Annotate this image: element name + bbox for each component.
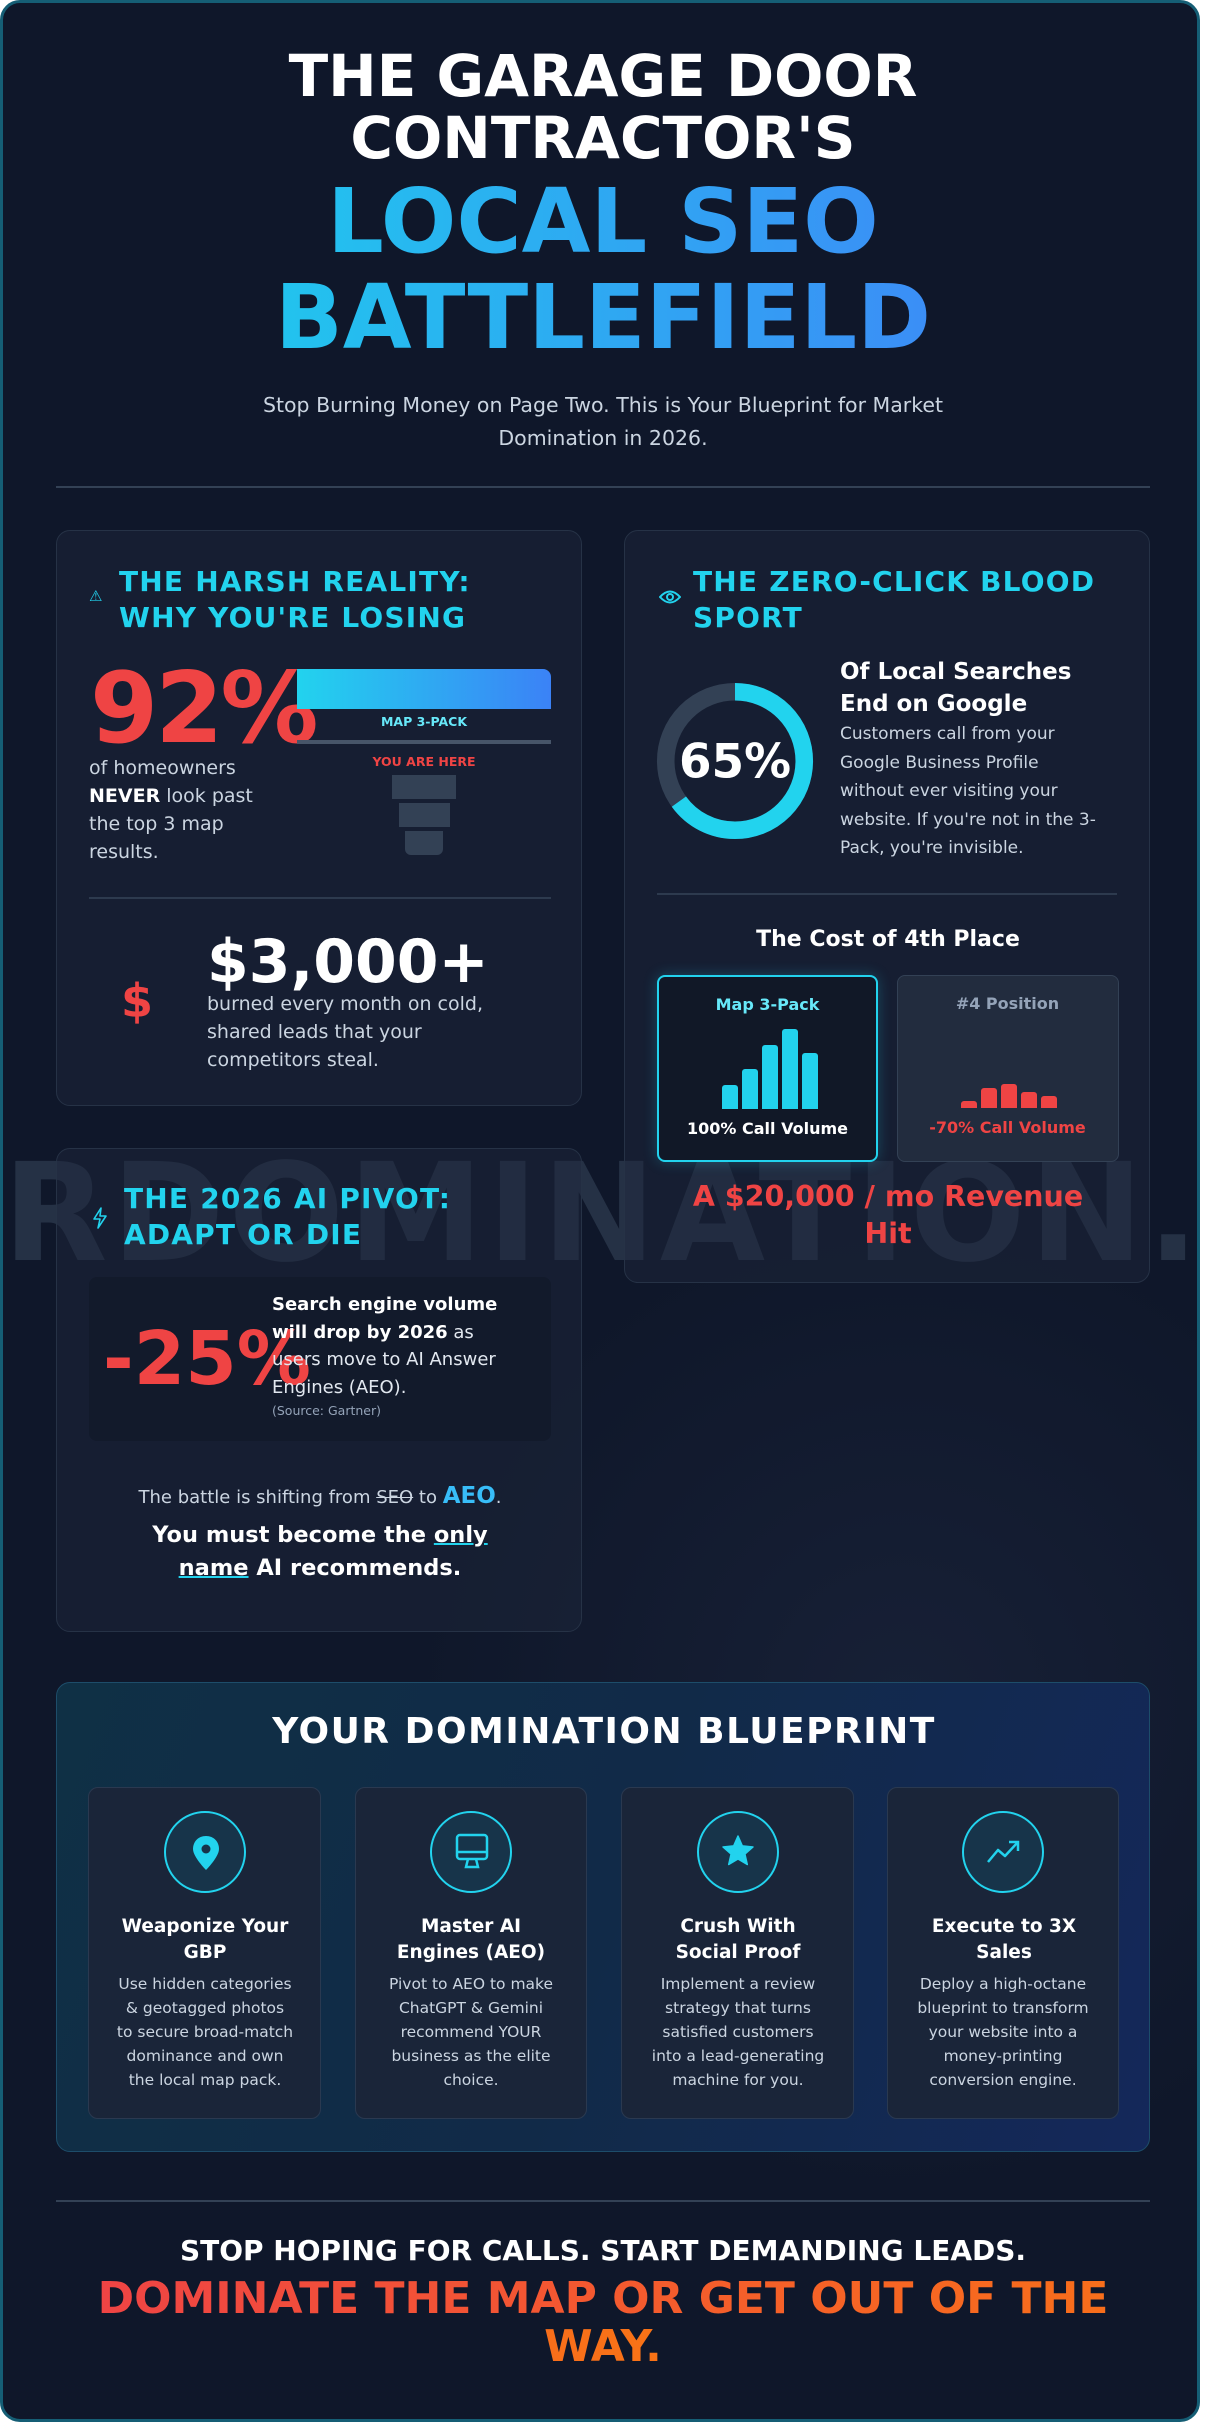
heading: cost of 4th place: The Cost of 4th Place	[756, 927, 1020, 952]
heading: THE 2026 AI PIVOT:	[124, 1182, 451, 1215]
text: become the only name: You must become the only name AI recommends.	[152, 1522, 488, 1581]
heading	[119, 565, 471, 634]
icon: eye	[659, 590, 681, 604]
card 4: Execute to 3X Sales	[932, 1916, 1076, 1963]
card 4: money-printing	[944, 2047, 1062, 2065]
box: #4 position: -70% Call Volume	[929, 1118, 1086, 1137]
heading: ADAPT OR DIE	[124, 1218, 362, 1251]
card 4: blueprint to transform	[917, 1999, 1089, 2017]
card 1: Use hidden categories	[118, 1975, 292, 1993]
card 1: to secure broad-match	[117, 2023, 293, 2041]
callout: revenue hit: A $20,000 / mo Revenue Hit	[693, 1180, 1083, 1250]
panel: AI pivot	[56, 1148, 582, 1632]
card 3: satisfied customers	[662, 2023, 814, 2041]
footer tagline: STOP HOPING FOR CALLS. START DEMANDING LEADS.	[180, 2234, 1026, 2267]
heading: SPORT	[693, 601, 803, 634]
box: #4 position	[897, 975, 1119, 1162]
card 3: Crush With Social Proof	[676, 1916, 800, 1963]
card 4: conversion engine.	[929, 2071, 1077, 2089]
icon: warning: ⚠	[89, 587, 102, 605]
stat box -25%: (Source: Gartner)	[272, 1403, 381, 1418]
title: CONTRACTOR'S	[350, 104, 856, 172]
box: map 3-pack: 100% Call Volume	[687, 1119, 848, 1138]
box: #4 position: #4 Position	[956, 994, 1059, 1013]
panel: zero-click	[624, 530, 1150, 1283]
card 2: choice.	[443, 2071, 499, 2089]
icon: lightning	[93, 1207, 107, 1229]
card 1: the local map pack.	[129, 2071, 281, 2089]
card 3: machine for you.	[672, 2071, 804, 2089]
panel: harsh reality	[56, 530, 582, 1106]
text: local searches: Of Local Searches End on Google	[840, 659, 1071, 717]
card 4: Deploy a high-octane	[920, 1975, 1086, 1993]
donut 65%: 65%	[679, 736, 791, 790]
box: map 3-pack	[657, 975, 878, 1162]
heading: YOUR DOMINATION BLUEPRINT	[272, 1711, 936, 1752]
stat 92%: 92%	[90, 652, 316, 766]
text: homeowners: of homeowners NEVER look past the top 3 map results.	[89, 757, 253, 863]
icon: trend up	[962, 1811, 1044, 1893]
panel: blueprint	[56, 1682, 1150, 2152]
heading: THE HARSH REALITY:	[119, 565, 471, 598]
card 3: strategy that turns	[665, 1999, 811, 2017]
card 2	[355, 1787, 587, 2119]
map pack graphic: MAP 3-PACK	[381, 714, 467, 729]
title: THE GARAGE DOOR	[289, 42, 917, 110]
card 1	[88, 1787, 321, 2119]
map pack graphic: YOU ARE HERE	[372, 754, 476, 769]
title	[275, 42, 931, 369]
text: local searches	[840, 659, 1096, 858]
text: battle shifting: The battle is shifting from SEO to AEO.	[138, 1483, 502, 1509]
donut 65%	[657, 683, 814, 839]
map pack graphic	[297, 669, 551, 855]
icon: dollar: $	[121, 974, 153, 1028]
stat box -25%: -25%	[103, 1316, 311, 1402]
icon: map pin	[164, 1811, 246, 1893]
card 3	[621, 1787, 854, 2119]
heading	[693, 565, 1095, 634]
card 2: ChatGPT & Gemini	[399, 1999, 543, 2017]
watermark: RDOMINATION.	[3, 1135, 1200, 1293]
card 2: recommend YOUR	[401, 2023, 541, 2041]
card 1: & geotagged photos	[126, 1999, 284, 2017]
card 1: Weaponize Your GBP	[122, 1916, 288, 1963]
title: LOCAL SEO	[327, 169, 879, 273]
text: local searches: Customers call from your Google Business Profile without ever visiting your website. If you're not in the 3- Pack, you're invisible.	[840, 724, 1096, 858]
card 2: Pivot to AEO to make	[389, 1975, 553, 1993]
stat box -25%: Search engine volume will drop by 2026 as users move to AI Answer Engines (AEO).	[272, 1294, 497, 1398]
card 3: Implement a review	[661, 1975, 815, 1993]
card 3: into a lead-generating	[652, 2047, 824, 2065]
stat box -25%	[89, 1277, 551, 1441]
heading: THE ZERO-CLICK BLOOD	[693, 565, 1095, 598]
card 2: Master AI Engines (AEO)	[397, 1916, 545, 1963]
subtitle: Stop Burning Money on Page Two. This is Your Blueprint for Market Domination in 2026.	[263, 393, 943, 450]
box: map 3-pack: Map 3-Pack	[716, 995, 819, 1014]
icon: star	[697, 1811, 779, 1893]
footer call to action: DOMINATE THE MAP OR GET OUT OF THE WAY.	[98, 2273, 1108, 2372]
heading	[124, 1182, 451, 1251]
heading: WHY YOU'RE LOSING	[119, 601, 466, 634]
card 4	[887, 1787, 1119, 2119]
stat $3,000+: $3,000+	[207, 927, 489, 997]
card 4: your website into a	[929, 2023, 1077, 2041]
title: BATTLEFIELD	[275, 265, 931, 369]
panel: harsh reality: burned every month on cold, shared leads that your competitors steal.	[207, 993, 483, 1071]
icon: monitor	[430, 1811, 512, 1893]
card 2: business as the elite	[391, 2047, 551, 2065]
card 1: dominance and own	[127, 2047, 283, 2065]
